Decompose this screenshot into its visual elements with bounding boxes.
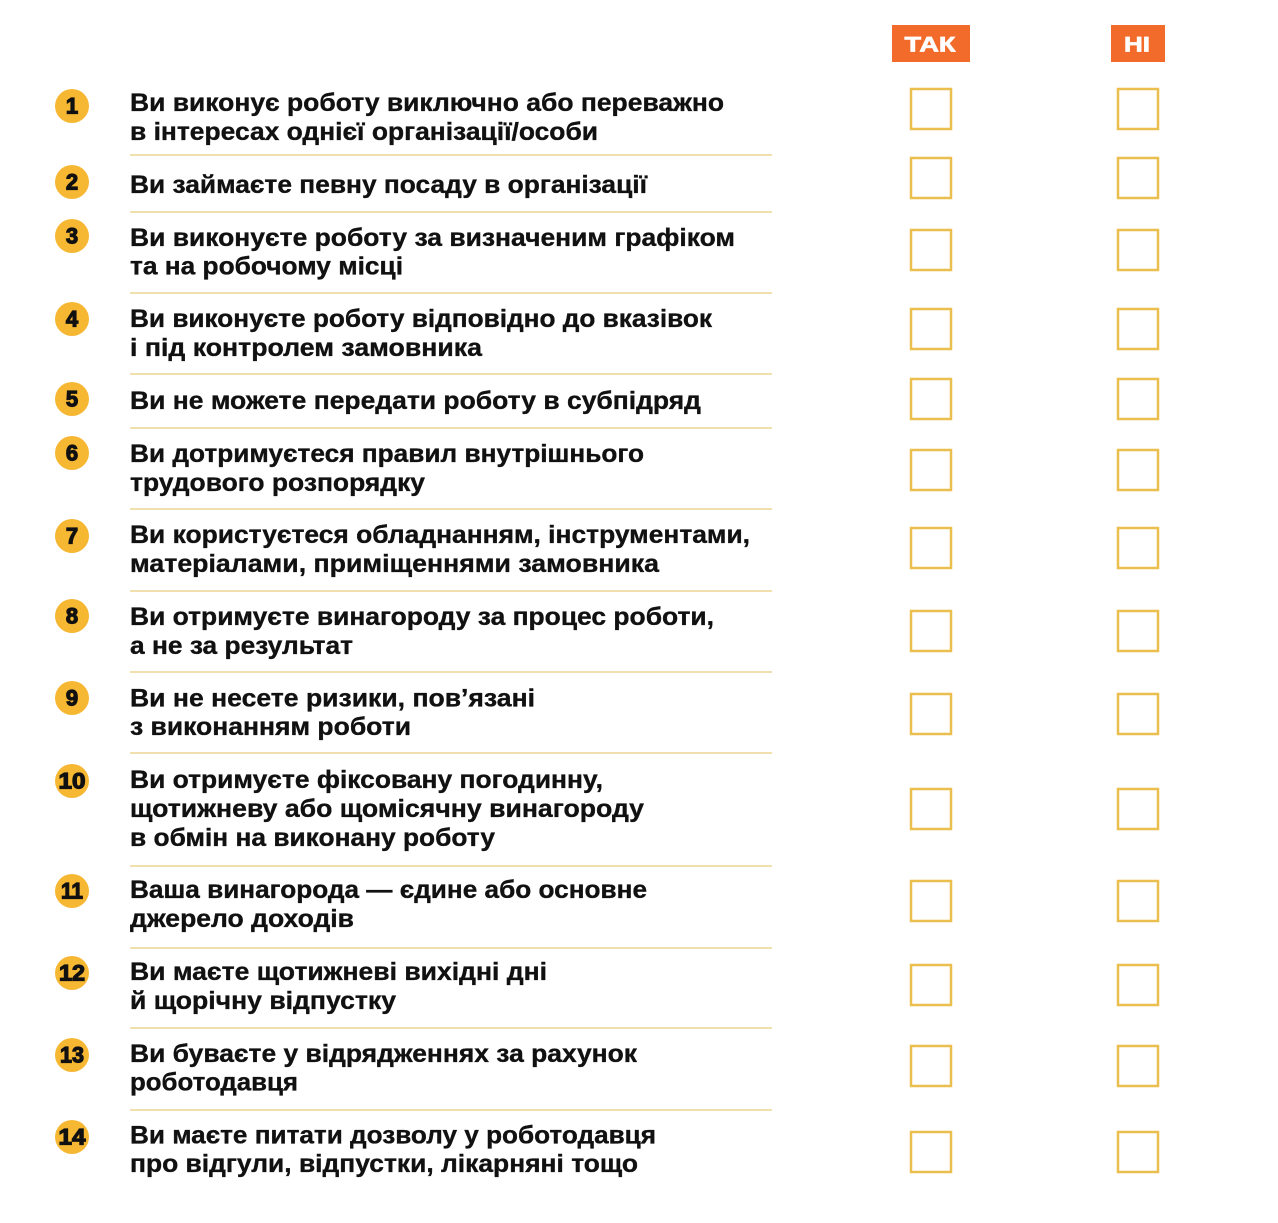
row 14: 14 (58, 1124, 86, 1150)
row 6: трудового розпорядку (130, 469, 425, 497)
column header: ТАК: ТАК (904, 34, 956, 56)
row 7: 7 (66, 524, 78, 548)
column header: НІ (1111, 25, 1165, 62)
row 12: й щорічну відпустку (130, 987, 396, 1015)
row 13: 13 (60, 1042, 84, 1068)
row 5: Ви не можете передати роботу в субпідряд (130, 387, 701, 415)
row 6: Ви дотримуєтеся правил внутрішнього (130, 440, 644, 468)
row 8: Ви отримуєте винагороду за процес роботи, (130, 603, 714, 631)
row 9: 9 (66, 686, 78, 710)
row 11: джерело доходів (130, 905, 354, 933)
row 7 (55, 519, 1158, 578)
row 11: Ваша винагорода — єдине або основне (130, 876, 647, 904)
row 13: Ви буваєте у відрядженнях за рахунок (130, 1040, 638, 1068)
row 10: щотижневу або щомісячну винагороду (130, 795, 644, 823)
row 1: в інтересах однієї організації/особи (130, 118, 598, 146)
row 7: Ви користуєтеся обладнанням, інструментами, (130, 521, 750, 549)
column header: ТАК (892, 25, 970, 62)
row 13 (55, 1038, 1158, 1096)
row 4: 4 (66, 306, 79, 332)
row 9: Ви не несете ризики, пов’язані (130, 684, 535, 712)
row 2: Ви займаєте певну посаду в організації (130, 171, 648, 199)
row 13: роботодавця (130, 1068, 298, 1096)
row 10: 10 (58, 768, 86, 794)
row 5 (55, 379, 1158, 419)
row 14 (55, 1120, 1158, 1178)
row 10: Ви отримуєте фіксовану погодинну, (130, 766, 603, 794)
row 9: з виконанням роботи (130, 713, 411, 741)
row 12: 12 (59, 960, 85, 986)
row 12: Ви маєте щотижневі вихідні дні (130, 958, 547, 986)
row 3: 3 (66, 224, 78, 248)
row 8 (55, 599, 1158, 660)
row 4: Ви виконуєте роботу відповідно до вказівок (130, 305, 712, 333)
row 4: і під контролем замовника (130, 334, 483, 362)
row 6 (55, 436, 1158, 497)
row 8: 8 (66, 604, 78, 628)
row 2: 2 (66, 170, 78, 194)
row 5: 5 (66, 386, 78, 412)
row 12 (55, 956, 1158, 1015)
row 9 (55, 681, 1158, 741)
row 11: 11 (61, 878, 83, 904)
row 11 (55, 874, 1158, 933)
row 4 (55, 302, 1158, 362)
row 3: Ви виконуєте роботу за визначеним графіком (130, 224, 735, 252)
row 14: про відгули, відпустки, лікарняні тощо (130, 1150, 638, 1178)
row 10 (55, 764, 1158, 852)
column header: НІ: НІ (1124, 34, 1150, 56)
row 8: а не за результат (130, 632, 353, 660)
row 3 (55, 219, 1158, 280)
row 7: матеріалами, приміщеннями замовника (130, 550, 660, 578)
row 1: 1 (66, 94, 78, 118)
row 1: Ви виконує роботу виключно або переважно (130, 89, 724, 117)
row 14: Ви маєте питати дозволу у роботодавця (130, 1122, 656, 1150)
row 1 (55, 89, 1158, 146)
row 3: та на робочому місці (130, 252, 403, 280)
row 6: 6 (66, 440, 78, 466)
row 2 (55, 158, 1158, 199)
row 10: в обмін на виконану роботу (130, 824, 495, 852)
